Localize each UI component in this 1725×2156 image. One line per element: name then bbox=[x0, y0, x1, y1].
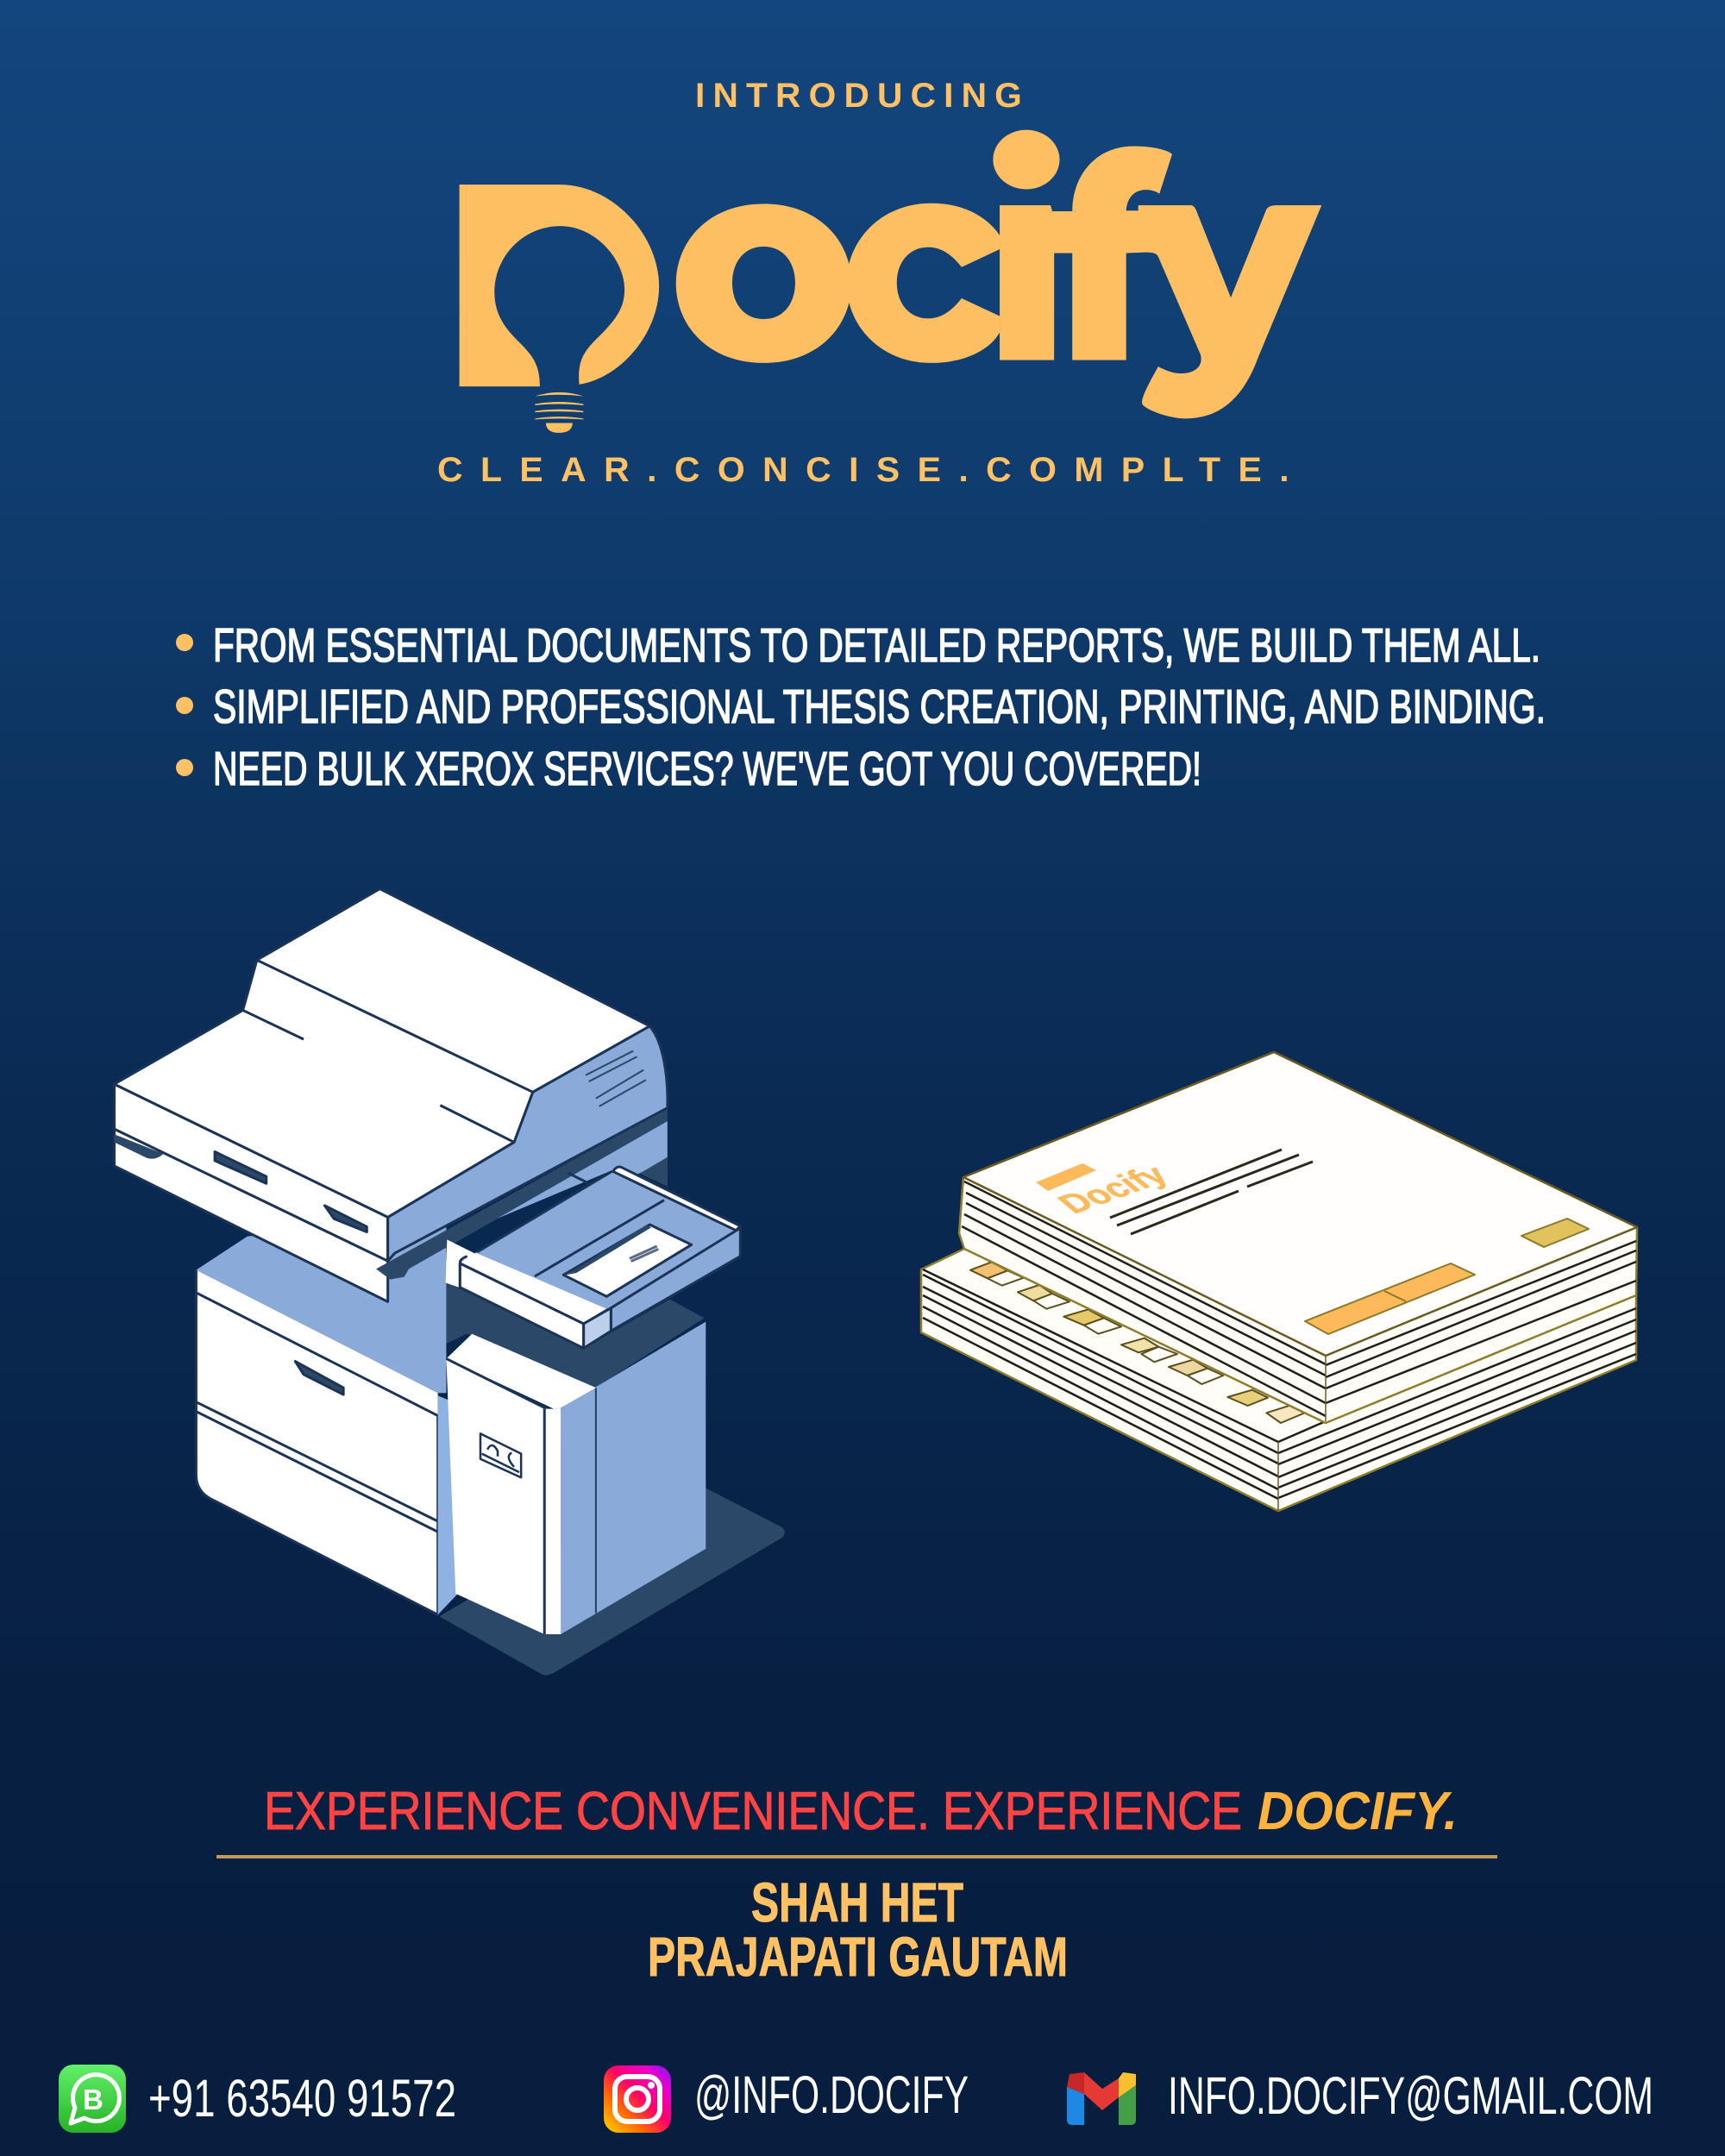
printer: dark recess under tray bbox=[446, 1282, 705, 1390]
intro label: INTRODUCING bbox=[695, 77, 1030, 115]
logo: letter c bbox=[847, 204, 1000, 363]
illustration: printer bbox=[115, 889, 785, 1675]
Instagram handle: @INFO.DOCIFY bbox=[694, 2065, 969, 2124]
bullet 3 bbox=[176, 742, 1201, 795]
closing statement bbox=[264, 1782, 1458, 1841]
icon: WhatsApp Business: B bbox=[83, 2084, 104, 2115]
closing statement: Docify text: DOCIFY. bbox=[1258, 1782, 1458, 1841]
printer: output tray bbox=[446, 1157, 740, 1348]
printer: right cabinet bbox=[446, 1322, 706, 1634]
name: Prajapati Gautam: PRAJAPATI GAUTAM bbox=[648, 1926, 1068, 1988]
closing statement: red text: EXPERIENCE CONVENIENCE. EXPERIENCE bbox=[264, 1782, 1242, 1841]
logo: letter o bbox=[676, 204, 851, 363]
name: Shah Het: SHAH HET bbox=[751, 1871, 963, 1934]
printer: lower cabinet bbox=[196, 1226, 458, 1614]
printer: scanner base strip bbox=[115, 1108, 668, 1301]
icon: WhatsApp Business bbox=[59, 2065, 126, 2133]
bullet list bbox=[176, 618, 1546, 795]
top sheet bbox=[963, 1052, 1637, 1356]
tagline: CLEAR.CONCISE.COMPLTE. bbox=[437, 451, 1307, 489]
bullet 3: NEED BULK XEROX SERVICES? WE'VE GOT YOU COVERED! bbox=[213, 742, 1201, 795]
Docify logo bbox=[460, 130, 1321, 433]
icon: Gmail bbox=[1067, 2072, 1136, 2125]
printer: main body bbox=[115, 889, 706, 1634]
printer: scanner lid bbox=[115, 889, 668, 1261]
lower stack of papers bbox=[921, 1249, 1636, 1511]
illustration: stack of documents bbox=[921, 1052, 1637, 1511]
mini logo on document: Docify bbox=[1050, 1159, 1176, 1219]
divider rule bbox=[216, 1855, 1497, 1858]
upper stack of papers bbox=[959, 1052, 1637, 1423]
logo: letters ify bbox=[993, 130, 1321, 418]
colored page tabs bbox=[970, 1262, 1308, 1423]
printer: floor shadow bbox=[439, 1488, 785, 1675]
icon: Instagram bbox=[604, 2065, 671, 2133]
phone number: +91 63540 91572 bbox=[148, 2069, 456, 2128]
logo: light bulb letter D bbox=[460, 185, 659, 433]
printer: scanner lower body bbox=[388, 1121, 668, 1301]
